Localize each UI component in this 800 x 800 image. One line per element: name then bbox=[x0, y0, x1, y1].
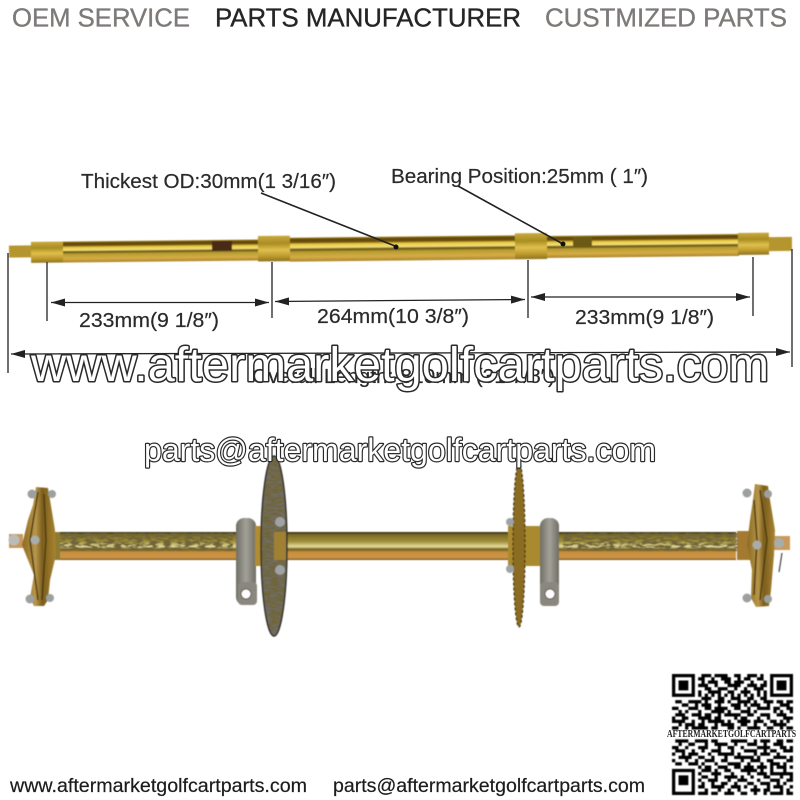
bearing seat marking bbox=[573, 237, 592, 247]
rust texture right bbox=[563, 533, 738, 551]
watermark: email: parts@aftermarketgolfcartparts.com bbox=[144, 432, 656, 468]
right hub bbox=[737, 484, 790, 607]
bare axle shaft photo bbox=[9, 230, 792, 265]
leader line: bearing position bbox=[458, 186, 563, 244]
label: left length: 233mm(9 1/8″) bbox=[79, 310, 219, 332]
label: right length: 233mm(9 1/8″) bbox=[575, 307, 714, 329]
leader end dot: bearing position bbox=[560, 242, 566, 246]
right shaft section bbox=[547, 234, 739, 258]
label: centre length: 264mm(10 3/8″) bbox=[317, 306, 469, 328]
left bearing block bbox=[236, 518, 257, 605]
left shaft section bbox=[63, 239, 259, 263]
dimension lines bbox=[8, 186, 792, 373]
assembled shaft bbox=[56, 532, 736, 560]
dimension arrow: right 233mm bbox=[531, 296, 750, 298]
dimension labels bbox=[79, 166, 714, 388]
header: customized parts: CUSTMIZED PARTS bbox=[545, 2, 787, 32]
watermark: website: www.aftermarketgolfcartparts.com bbox=[30, 339, 769, 392]
header: OEM service: OEM SERVICE bbox=[12, 2, 190, 32]
marking on left shaft bbox=[212, 241, 232, 251]
dimension arrow: centre 264mm bbox=[275, 300, 525, 302]
left hub bbox=[8, 487, 60, 606]
label: overall length: Overall Length:-810mm (31 7/8″) bbox=[252, 366, 555, 388]
right thread bbox=[769, 237, 792, 251]
header banner bbox=[12, 2, 787, 32]
assembled axle photo bbox=[8, 456, 790, 636]
brake disc bbox=[255, 456, 287, 636]
QR modules bbox=[672, 676, 793, 793]
dimension arrow: left 233mm bbox=[51, 302, 269, 304]
label: thickest OD: Thickest OD:30mm(1 3/16″) bbox=[81, 171, 336, 193]
right knurl bbox=[738, 233, 769, 255]
left splined collar bbox=[258, 236, 290, 261]
right splined collar bbox=[515, 233, 547, 259]
label: bearing position: Bearing Position:25mm ( 1″) bbox=[391, 166, 648, 188]
centre shaft section bbox=[290, 235, 516, 262]
extension lines bbox=[8, 249, 792, 373]
leader line: thickest OD bbox=[261, 193, 395, 246]
leader end dot: thickest OD bbox=[394, 244, 398, 250]
footer website: www.aftermarketgolfcartparts.com bbox=[9, 775, 307, 797]
rust texture left bbox=[58, 533, 233, 551]
right bearing block bbox=[540, 518, 559, 606]
header: parts manufacturer: PARTS MANUFACTURER bbox=[215, 2, 521, 32]
left knurl bbox=[31, 242, 63, 263]
left thread bbox=[9, 245, 31, 258]
dimension arrow: overall length bbox=[11, 352, 790, 354]
QR code bbox=[667, 676, 796, 793]
sprocket bbox=[506, 463, 540, 627]
footer email: parts@aftermarketgolfcartparts.com bbox=[333, 775, 645, 797]
